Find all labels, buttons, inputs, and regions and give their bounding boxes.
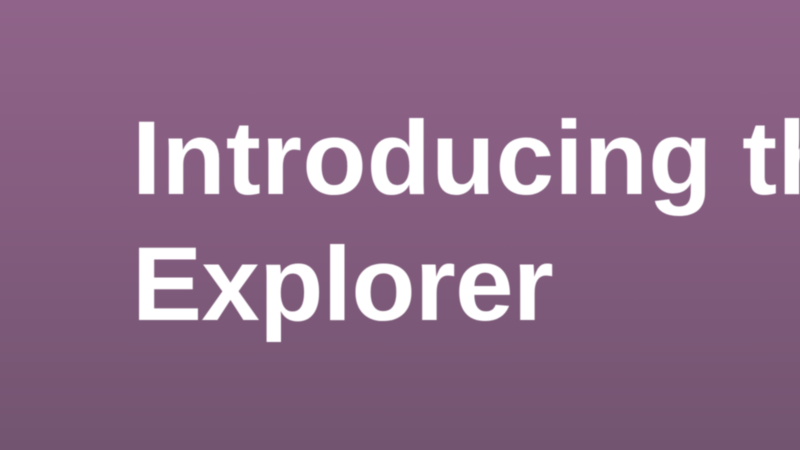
title line 2: Explorer [132,226,553,343]
